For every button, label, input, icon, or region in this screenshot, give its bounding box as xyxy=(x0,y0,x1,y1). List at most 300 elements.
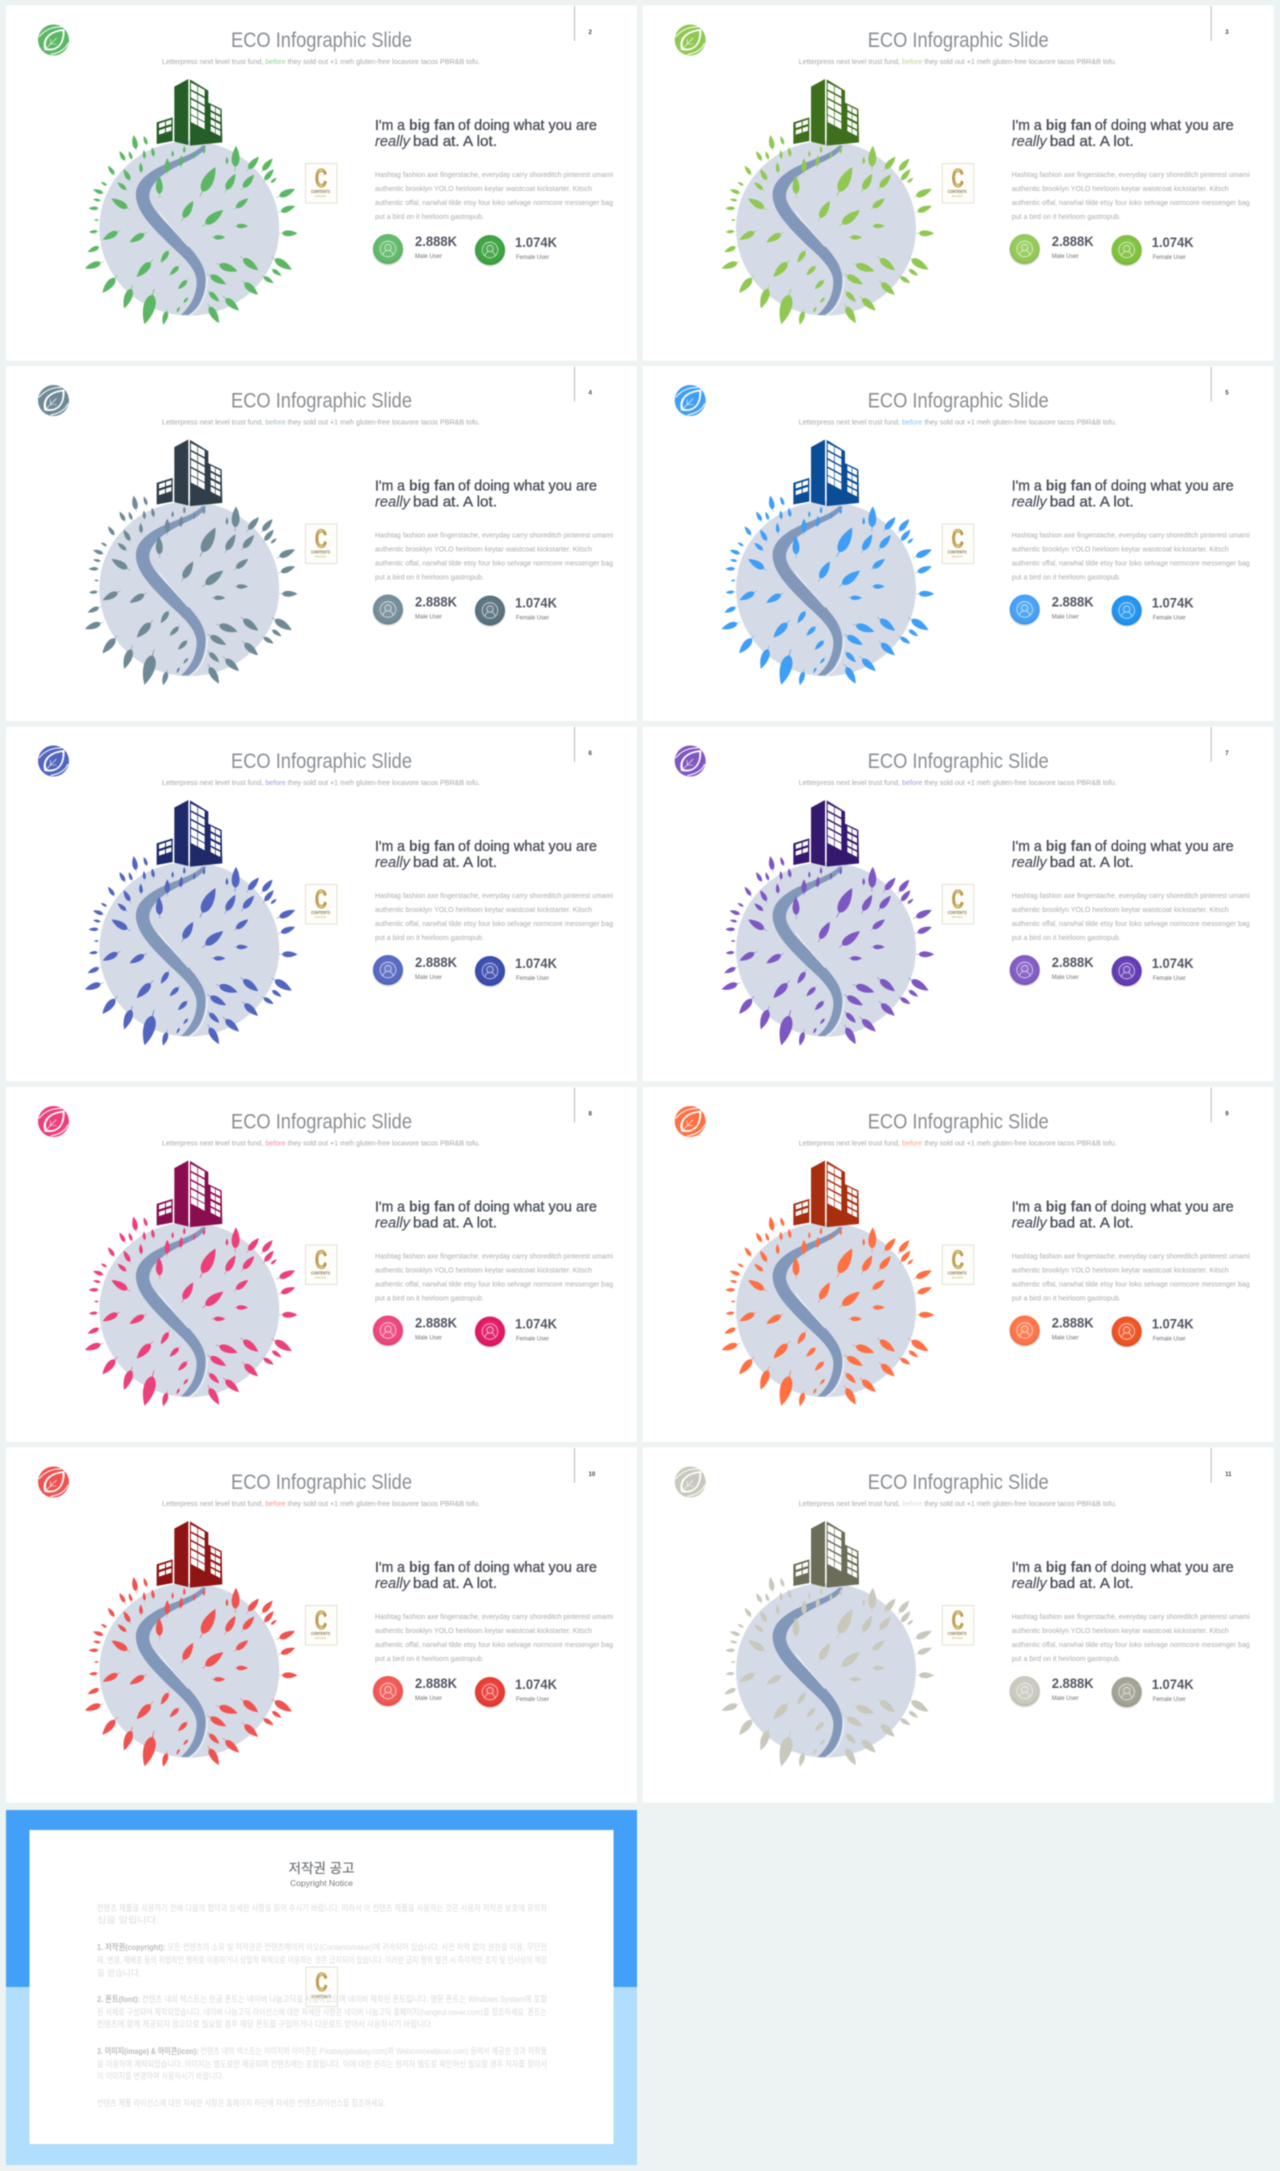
watermark logo: C xyxy=(952,163,964,193)
panel: slide 3 lime xyxy=(643,6,1274,360)
watermark logo: CONTENTS xyxy=(948,550,967,554)
illustration: planet with building and road xyxy=(721,79,934,326)
heading: I'm a xyxy=(375,1559,406,1576)
body text: authentic brooklyn YOLO heirloom keytar waistcoat kickstarter. Kitsch xyxy=(375,1266,592,1274)
heading: of doing what you are xyxy=(1095,478,1234,494)
body text xyxy=(1012,891,1250,942)
illustration: planet with building and road xyxy=(721,1521,934,1768)
icon: leaf logo xyxy=(38,1106,69,1137)
stat: female user: Female User xyxy=(516,976,549,982)
panel: copyright notice xyxy=(6,1810,637,2165)
heading: bad at. A lot. xyxy=(1050,1214,1134,1232)
stat: female user: Female User xyxy=(1153,1697,1186,1703)
page number: 9 xyxy=(1225,1112,1229,1118)
stat: male user xyxy=(372,954,457,987)
heading: big fan xyxy=(409,478,455,494)
copyright section 1: 재, 변경, 재배포 등의 위법적인 행위로 이용하거나 상업적 목적으로 이용하는 것은 금지되어 있습니다. 이러한 금지 행위 발견 시 즉각적인 조치 및 민사상의 책임 xyxy=(97,1955,547,1965)
watermark logo: MAKER xyxy=(952,915,963,919)
body text: authentic brooklyn YOLO heirloom keytar waistcoat kickstarter. Kitsch xyxy=(1012,905,1229,914)
heading: bad at. A lot. xyxy=(413,133,497,150)
body text: Hashtag fashion axe fingerstache, everyday carry shoreditch pinterest umami xyxy=(375,1612,613,1621)
heading xyxy=(375,1559,597,1592)
body text xyxy=(1012,170,1250,221)
body text: authentic offal, narwhal tilde etsy four loko selvage normcore messenger bag xyxy=(375,1640,613,1649)
stat: female user: Female User xyxy=(516,616,549,622)
body text: put a bird on it heirloom gastropub. xyxy=(375,1294,484,1302)
stat: male user: Male User xyxy=(1052,614,1079,620)
page number xyxy=(574,1088,592,1122)
heading: I'm a xyxy=(375,117,406,134)
stat: male user: Male User xyxy=(415,1336,442,1342)
page number xyxy=(1211,727,1229,762)
panel: slide 10 red xyxy=(6,1448,637,1802)
stat: male user: Male User xyxy=(1052,1696,1079,1702)
stat: female user xyxy=(1111,594,1194,627)
heading: really xyxy=(375,494,411,510)
illustration: planet with building and road xyxy=(721,1160,934,1407)
watermark logo xyxy=(942,1605,974,1645)
stat: female user: 1.074K xyxy=(515,955,557,971)
heading: of doing what you are xyxy=(458,838,597,855)
heading xyxy=(1012,117,1234,150)
copyright section 1: 을 받습니다. xyxy=(97,1968,141,1978)
stat: female user: 1.074K xyxy=(515,234,557,250)
body text xyxy=(375,891,613,942)
body text: authentic offal, narwhal tilde etsy four loko selvage normcore messenger bag xyxy=(1012,198,1250,207)
watermark logo: C xyxy=(952,1244,964,1274)
stat: female user xyxy=(474,955,557,988)
body text: authentic offal, narwhal tilde etsy four loko selvage normcore messenger bag xyxy=(1012,1640,1250,1649)
heading: really xyxy=(1012,1214,1048,1232)
heading: of doing what you are xyxy=(1095,838,1234,855)
title: ECO Infographic Slide xyxy=(231,29,412,52)
stat: male user: Male User xyxy=(415,975,442,981)
copyright section 2: 된 서체로 구성되어 제작되었습니다. 네이버 나눔고딕 라이선스에 대한 자세한 사항은 네이버 나눔고딕 홈페이지(hangeul.naver.com)를 참조하세요. 폰트는 xyxy=(97,2007,547,2017)
stat: male user: Male User xyxy=(415,1696,442,1702)
body text: authentic offal, narwhal tilde etsy four loko selvage normcore messenger bag xyxy=(1012,558,1250,568)
title: ECO Infographic Slide xyxy=(868,1110,1049,1134)
stat: female user: 1.074K xyxy=(1152,1676,1194,1692)
stat: female user: Female User xyxy=(1153,616,1186,622)
page number: 5 xyxy=(1225,390,1229,396)
stat: female user: Female User xyxy=(516,255,549,261)
heading: I'm a xyxy=(1012,478,1042,494)
page number xyxy=(574,366,592,402)
body text: put a bird on it heirloom gastropub. xyxy=(1012,933,1121,942)
copyright section 3: 3. 이미지(image) & 아이콘(icon): 컨텐츠 내의 텍스트는 이미지와 아이콘은 Pixabay(pixabay.com)와 Webicon(webicon.com) 등에서 제공한 것과 저작물 xyxy=(97,2046,547,2056)
body text: authentic offal, narwhal tilde etsy four loko selvage normcore messenger bag xyxy=(375,558,613,568)
stat: female user: 1.074K xyxy=(1152,234,1194,250)
stat: male user: 2.888K xyxy=(415,954,457,970)
title: ECO Infographic Slide xyxy=(868,390,1049,412)
heading: big fan xyxy=(1046,117,1092,134)
stat: male user xyxy=(1009,1314,1094,1347)
icon: leaf logo xyxy=(38,385,69,416)
heading: of doing what you are xyxy=(458,478,597,494)
page number: 7 xyxy=(1225,751,1229,757)
copyright intro text xyxy=(97,1903,547,1925)
stat: female user: Female User xyxy=(1153,255,1186,261)
subtitle: Letterpress next level trust fund, before they sold out +1 meh gluten-free locavore tacos PBR&B tofu. xyxy=(162,418,480,426)
body text xyxy=(1012,1612,1250,1663)
body text: put a bird on it heirloom gastropub. xyxy=(1012,1654,1121,1663)
copyright section 3 xyxy=(97,2046,547,2081)
body text: Hashtag fashion axe fingerstache, everyday carry shoreditch pinterest umami xyxy=(375,530,613,540)
page number xyxy=(1211,1448,1232,1483)
watermark logo: CONTENTS xyxy=(311,550,330,554)
stat: male user: 2.888K xyxy=(1052,1675,1094,1691)
body text: authentic brooklyn YOLO heirloom keytar waistcoat kickstarter. Kitsch xyxy=(375,1626,592,1635)
heading xyxy=(1012,838,1234,871)
watermark logo: CONTENTS xyxy=(311,1270,330,1276)
stat: male user: 2.888K xyxy=(1052,954,1094,970)
heading: of doing what you are xyxy=(458,1559,597,1576)
stat: male user: 2.888K xyxy=(415,594,457,610)
body text: put a bird on it heirloom gastropub. xyxy=(1012,212,1121,221)
page number: 4 xyxy=(588,390,592,396)
body text xyxy=(375,1612,613,1663)
heading: really xyxy=(1012,133,1048,150)
watermark logo: MAKER xyxy=(952,1276,963,1280)
watermark logo: CONTENTS xyxy=(312,1994,330,1999)
heading: I'm a xyxy=(375,838,406,855)
page number xyxy=(574,727,592,762)
panel: slide 5 blue xyxy=(643,366,1274,721)
heading: really xyxy=(1012,494,1048,510)
body text: put a bird on it heirloom gastropub. xyxy=(1012,572,1121,582)
copyright section 3: 이 이미지를 변경하여 사용하시기 바랍니다. xyxy=(97,2071,224,2081)
watermark logo xyxy=(942,524,974,564)
page number: 11 xyxy=(1225,1472,1232,1478)
stat: female user: 1.074K xyxy=(1152,1316,1194,1332)
stat: female user: 1.074K xyxy=(1152,594,1194,610)
heading: big fan xyxy=(1046,478,1092,494)
stat: male user xyxy=(372,594,457,626)
stat: female user: 1.074K xyxy=(515,594,557,610)
icon: leaf logo xyxy=(38,24,69,56)
page number xyxy=(1211,366,1229,402)
subtitle: Letterpress next level trust fund, before they sold out +1 meh gluten-free locavore tacos PBR&B tofu. xyxy=(799,418,1117,426)
heading: I'm a xyxy=(1012,838,1042,855)
heading: bad at. A lot. xyxy=(413,1575,497,1592)
panel: slide 9 orange xyxy=(643,1087,1274,1442)
panel: slide 7 purple xyxy=(643,726,1274,1082)
heading: bad at. A lot. xyxy=(1050,854,1134,871)
heading: really xyxy=(375,1214,411,1232)
body text: authentic offal, narwhal tilde etsy four loko selvage normcore messenger bag xyxy=(375,1280,613,1288)
watermark logo: C xyxy=(952,884,964,914)
page number xyxy=(574,6,592,41)
heading: of doing what you are xyxy=(1095,117,1234,134)
heading: bad at. A lot. xyxy=(413,494,497,510)
stat: female user xyxy=(1111,234,1194,267)
heading: of doing what you are xyxy=(1095,1198,1234,1216)
heading: big fan xyxy=(409,1198,455,1216)
watermark logo xyxy=(942,884,974,924)
title: ECO Infographic Slide xyxy=(231,1110,412,1134)
watermark logo: C xyxy=(316,1967,328,1997)
panel: slide 4 slate xyxy=(6,366,637,721)
heading xyxy=(1012,1559,1234,1592)
heading: really xyxy=(375,854,411,871)
body text: authentic brooklyn YOLO heirloom keytar waistcoat kickstarter. Kitsch xyxy=(1012,1266,1229,1274)
copyright section 2: 2. 폰트(font): 컨텐츠 내의 텍스트는 한글 폰트는 네이버 나눔고딕을 사용하였으며 네이버 제작된 폰트입니다. 영문 폰트는 Windows System에 포함 xyxy=(97,1994,547,2004)
icon: leaf logo xyxy=(38,1466,69,1498)
stat: female user xyxy=(474,1676,557,1709)
body text: authentic offal, narwhal tilde etsy four loko selvage normcore messenger bag xyxy=(1012,919,1250,928)
stat: male user: 2.888K xyxy=(415,1314,457,1330)
stat: female user xyxy=(1111,1316,1194,1348)
illustration: planet with building and road xyxy=(84,1160,297,1407)
page number: 2 xyxy=(588,30,592,36)
copyright section 1 xyxy=(97,1942,547,1978)
subtitle: Letterpress next level trust fund, before they sold out +1 meh gluten-free locavore tacos PBR&B tofu. xyxy=(799,1499,1117,1508)
stat: male user xyxy=(372,1675,457,1708)
copyright intro text: 컨텐츠 제품을 사용하기 전에 다음의 협약과 상세한 사항을 읽어 주시기 바랍니다. 따라서 이 컨텐츠 제품을 사용하는 것은 사용자 저작권 보호에 유의하 xyxy=(97,1903,547,1913)
watermark logo: MAKER xyxy=(315,1276,326,1280)
heading xyxy=(375,838,597,871)
body text xyxy=(375,530,613,582)
copyright section 3: 을 이용하여 제작되었습니다. 이미지는 별도로만 제공되며 컨텐츠에는 포함됩니다. 이에 대한 권리는 원저자 별도로 확인하신 필요할 경우 저자를 찾아서 xyxy=(97,2059,547,2069)
icon: leaf logo xyxy=(675,1106,706,1137)
watermark logo: MAKER xyxy=(315,194,326,198)
watermark logo: MAKER xyxy=(952,194,963,198)
watermark logo: CONTENTS xyxy=(948,189,967,194)
heading: bad at. A lot. xyxy=(413,1214,497,1232)
watermark logo: C xyxy=(315,163,327,193)
watermark logo: MAKER xyxy=(952,554,963,558)
subtitle: Letterpress next level trust fund, before they sold out +1 meh gluten-free locavore tacos PBR&B tofu. xyxy=(799,57,1117,66)
watermark logo: MAKER xyxy=(315,1636,326,1640)
illustration: planet with building and road xyxy=(721,800,934,1047)
stat: female user: Female User xyxy=(1153,1336,1186,1342)
body text: Hashtag fashion axe fingerstache, everyday carry shoreditch pinterest umami xyxy=(375,891,613,900)
body text: Hashtag fashion axe fingerstache, everyday carry shoreditch pinterest umami xyxy=(1012,1612,1250,1621)
illustration: planet with building and road xyxy=(721,439,934,686)
heading xyxy=(375,478,597,510)
stat: female user: Female User xyxy=(516,1336,549,1342)
body text: Hashtag fashion axe fingerstache, everyday carry shoreditch pinterest umami xyxy=(375,170,613,179)
body text: authentic brooklyn YOLO heirloom keytar waistcoat kickstarter. Kitsch xyxy=(1012,1626,1229,1635)
heading: big fan xyxy=(409,838,455,855)
stat: female user xyxy=(474,594,557,627)
heading: big fan xyxy=(1046,1559,1092,1576)
illustration: planet with building and road xyxy=(84,439,297,686)
heading: big fan xyxy=(1046,1198,1092,1216)
page number: 3 xyxy=(1225,30,1229,36)
stat: male user: 2.888K xyxy=(1052,233,1094,249)
stat: male user: Male User xyxy=(415,254,442,260)
body text: authentic brooklyn YOLO heirloom keytar waistcoat kickstarter. Kitsch xyxy=(375,905,592,914)
body text: authentic brooklyn YOLO heirloom keytar waistcoat kickstarter. Kitsch xyxy=(1012,184,1229,193)
icon: leaf logo xyxy=(38,746,69,776)
heading: of doing what you are xyxy=(1095,1559,1234,1576)
body text: authentic brooklyn YOLO heirloom keytar waistcoat kickstarter. Kitsch xyxy=(1012,544,1229,554)
heading: I'm a xyxy=(375,478,406,494)
page number xyxy=(1211,6,1229,41)
stat: female user: Female User xyxy=(516,1697,549,1703)
heading: big fan xyxy=(409,117,455,134)
watermark logo: C xyxy=(952,524,964,554)
illustration: planet with building and road xyxy=(84,79,297,326)
icon: leaf logo xyxy=(675,746,706,776)
subtitle: Letterpress next level trust fund, before they sold out +1 meh gluten-free locavore tacos PBR&B tofu. xyxy=(799,778,1117,787)
body text: authentic offal, narwhal tilde etsy four loko selvage normcore messenger bag xyxy=(1012,1280,1250,1288)
watermark logo: MAKER xyxy=(952,1636,963,1640)
heading xyxy=(1012,478,1234,510)
watermark logo: MAKER xyxy=(315,915,326,919)
body text: Hashtag fashion axe fingerstache, everyday carry shoreditch pinterest umami xyxy=(1012,530,1250,540)
heading: I'm a xyxy=(375,1198,406,1216)
body text: put a bird on it heirloom gastropub. xyxy=(375,212,484,221)
illustration: planet with building and road xyxy=(84,1521,297,1768)
title: ECO Infographic Slide xyxy=(868,750,1049,773)
stat: female user: 1.074K xyxy=(515,1676,557,1692)
stat: male user: Male User xyxy=(1052,1336,1079,1342)
panel: slide 6 indigo xyxy=(6,726,637,1082)
stat: male user xyxy=(1009,233,1094,266)
panel: slide 11 beige xyxy=(643,1448,1274,1802)
body text xyxy=(375,170,613,221)
heading xyxy=(1012,1198,1234,1232)
watermark logo: C xyxy=(315,1244,327,1274)
stat: female user xyxy=(1111,1676,1194,1709)
heading: really xyxy=(1012,854,1048,871)
icon: leaf logo xyxy=(675,1466,706,1498)
watermark logo: MAKER xyxy=(315,554,326,558)
copyright section 1: 1. 저작권(copyright): 모든 컨텐츠의 소유 및 저작권은 컨텐츠메이커 이오(Contentsmaker)에 귀속되어 있습니다. 사전 허락 없이 권한을 이용, 무단전 xyxy=(97,1942,547,1952)
body text: authentic brooklyn YOLO heirloom keytar waistcoat kickstarter. Kitsch xyxy=(375,184,592,193)
watermark logo xyxy=(306,1967,338,2006)
subtitle: Letterpress next level trust fund, before they sold out +1 meh gluten-free locavore tacos PBR&B tofu. xyxy=(162,1499,480,1508)
body text xyxy=(375,1252,613,1302)
title: ECO Infographic Slide xyxy=(231,750,412,773)
heading: of doing what you are xyxy=(458,1198,597,1216)
stat: male user: 2.888K xyxy=(1052,1314,1094,1330)
subtitle: Letterpress next level trust fund, before they sold out +1 meh gluten-free locavore tacos PBR&B tofu. xyxy=(162,1138,480,1148)
watermark logo xyxy=(306,163,337,203)
illustration: planet with building and road xyxy=(84,800,297,1047)
heading: big fan xyxy=(1046,838,1092,855)
stat: female user: 1.074K xyxy=(515,1316,557,1332)
title: ECO Infographic Slide xyxy=(231,390,412,412)
heading: I'm a xyxy=(1012,1198,1042,1216)
stat: female user xyxy=(474,1316,557,1348)
stat: male user: Male User xyxy=(1052,975,1079,981)
watermark logo: C xyxy=(315,524,327,554)
watermark logo: CONTENTS xyxy=(948,910,967,915)
body text: put a bird on it heirloom gastropub. xyxy=(375,1654,484,1663)
heading xyxy=(375,1198,597,1232)
icon: leaf logo xyxy=(675,24,706,56)
watermark logo: C xyxy=(952,1605,964,1635)
watermark logo: CONTENTS xyxy=(311,910,330,915)
heading: of doing what you are xyxy=(458,117,597,134)
body text: authentic brooklyn YOLO heirloom keytar waistcoat kickstarter. Kitsch xyxy=(375,544,592,554)
copyright section 2 xyxy=(97,1994,547,2029)
panel: slide 8 pink xyxy=(6,1087,637,1442)
body text: Hashtag fashion axe fingerstache, everyday carry shoreditch pinterest umami xyxy=(1012,1252,1250,1260)
body text: put a bird on it heirloom gastropub. xyxy=(1012,1294,1121,1302)
watermark logo: C xyxy=(315,1605,327,1635)
stat: female user: Female User xyxy=(1153,976,1186,982)
heading: really xyxy=(375,1575,411,1592)
heading: big fan xyxy=(409,1559,455,1576)
stat: male user: 2.888K xyxy=(415,1675,457,1691)
title: ECO Infographic Slide xyxy=(868,1471,1049,1494)
page number xyxy=(574,1448,596,1483)
body text: put a bird on it heirloom gastropub. xyxy=(375,572,484,582)
copyright intro text: 심을 알립니다. xyxy=(97,1915,159,1925)
stat: male user: 2.888K xyxy=(415,233,457,249)
body text: authentic offal, narwhal tilde etsy four loko selvage normcore messenger bag xyxy=(375,919,613,928)
watermark logo xyxy=(306,884,337,924)
body text: put a bird on it heirloom gastropub. xyxy=(375,933,484,942)
heading xyxy=(375,117,597,150)
stat: female user: 1.074K xyxy=(1152,955,1194,971)
heading: bad at. A lot. xyxy=(413,854,497,871)
title: ECO Infographic Slide xyxy=(231,1471,412,1494)
watermark logo: CONTENTS xyxy=(948,1631,967,1636)
copyright title: 저작권 공고 xyxy=(289,1861,355,1876)
watermark logo xyxy=(306,1244,337,1284)
icon: leaf logo xyxy=(675,385,706,416)
body text xyxy=(1012,1252,1250,1302)
body text xyxy=(1012,530,1250,582)
heading: bad at. A lot. xyxy=(1050,1575,1134,1592)
copyright section 2: 컨텐츠에 함께 제공되지 않으므로 필요할 경우 해당 폰트를 구입하거나 다운로드 받아서 사용하시기 바랍니다. xyxy=(97,2019,433,2029)
page number xyxy=(1211,1088,1229,1122)
heading: I'm a xyxy=(1012,1559,1042,1576)
watermark logo xyxy=(306,524,337,564)
heading: really xyxy=(1012,1575,1048,1592)
heading: really xyxy=(375,133,411,150)
stat: male user: 2.888K xyxy=(1052,594,1094,610)
watermark logo: CONTENTS xyxy=(311,189,330,194)
body text: authentic offal, narwhal tilde etsy four loko selvage normcore messenger bag xyxy=(375,198,613,207)
heading: bad at. A lot. xyxy=(1050,133,1134,150)
stat: male user xyxy=(1009,594,1094,626)
stat: male user xyxy=(372,233,457,266)
page number: 6 xyxy=(588,751,592,757)
stat: male user xyxy=(1009,1675,1094,1708)
watermark logo: C xyxy=(315,884,327,914)
page number: 10 xyxy=(588,1472,596,1478)
heading: bad at. A lot. xyxy=(1050,494,1134,510)
subtitle: Letterpress next level trust fund, before they sold out +1 meh gluten-free locavore tacos PBR&B tofu. xyxy=(162,778,480,787)
subtitle: Letterpress next level trust fund, before they sold out +1 meh gluten-free locavore tacos PBR&B tofu. xyxy=(162,57,480,66)
stat: male user xyxy=(1009,954,1094,987)
watermark logo xyxy=(942,163,974,203)
body text: Hashtag fashion axe fingerstache, everyday carry shoreditch pinterest umami xyxy=(1012,170,1250,179)
watermark logo: CONTENTS xyxy=(311,1631,330,1636)
body text: Hashtag fashion axe fingerstache, everyday carry shoreditch pinterest umami xyxy=(375,1252,613,1260)
panel: slide 2 green xyxy=(6,6,637,360)
watermark logo xyxy=(306,1605,337,1645)
stat: male user: Male User xyxy=(415,614,442,620)
stat: male user xyxy=(372,1314,457,1347)
copyright closing line: 컨텐츠 제품 라이선스에 대한 자세한 사항은 홈페이지 하단에 자세한 컨텐츠라이선스를 참조하세요. xyxy=(97,2098,386,2108)
watermark logo xyxy=(942,1244,974,1284)
subtitle: Letterpress next level trust fund, before they sold out +1 meh gluten-free locavore tacos PBR&B tofu. xyxy=(799,1138,1117,1148)
watermark logo: CONTENTS xyxy=(948,1270,967,1276)
heading: I'm a xyxy=(1012,117,1042,134)
stat: female user xyxy=(474,234,557,267)
stat: male user: Male User xyxy=(1052,254,1079,260)
page number: 8 xyxy=(588,1112,592,1118)
stat: female user xyxy=(1111,955,1194,988)
copyright subtitle: Copyright Notice xyxy=(290,1878,353,1888)
